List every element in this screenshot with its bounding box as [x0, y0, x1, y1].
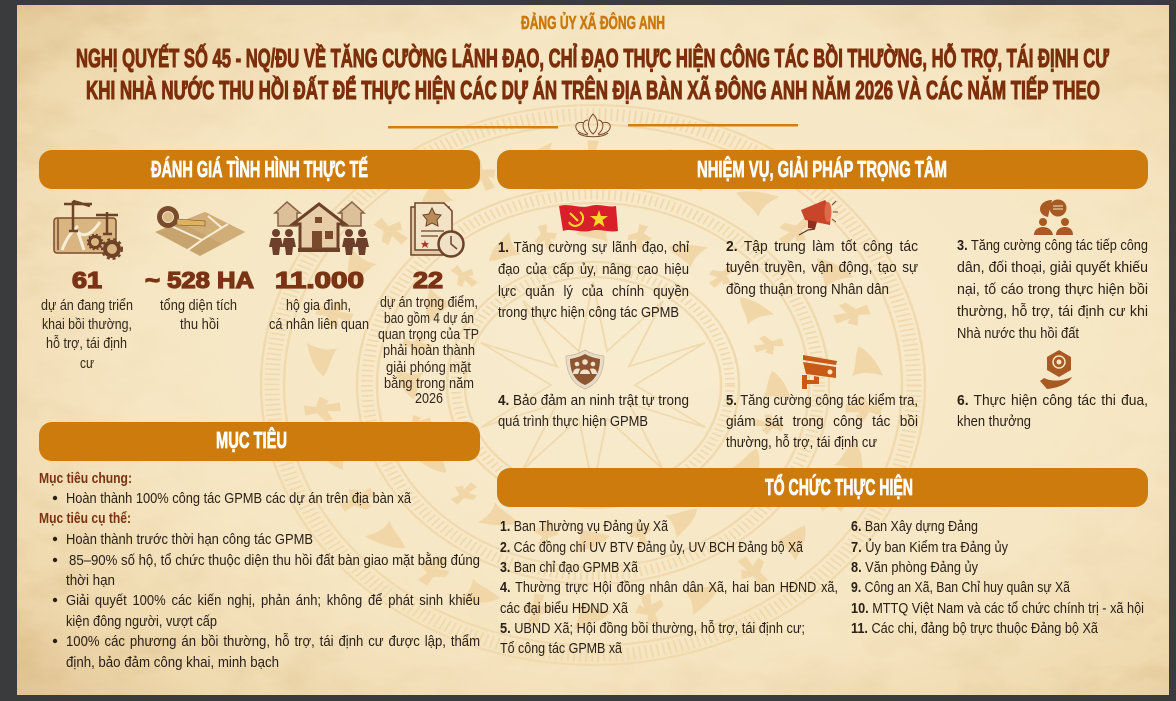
task 6 [957, 392, 1148, 430]
icon: megaphone [799, 200, 838, 235]
stat: 22 key projects: bao gồm 4 dự án [384, 310, 474, 327]
stat: 22 key projects: dự án trọng điểm, [380, 294, 478, 311]
implementers list, right column: 8. Văn phòng Đảng ủy [851, 559, 978, 576]
heading bar: tasks [497, 150, 1148, 189]
task 6: khen thưởng [957, 413, 1031, 430]
task 3: Nhà nước thu hồi đất [957, 325, 1080, 342]
task 4: 4. Bảo đảm an ninh trật tự trong [498, 392, 689, 409]
stat: 22 key projects: quan trọng của TP [378, 326, 479, 343]
stat: 61 projects: hỗ trợ, tái định [46, 335, 127, 352]
task 5: giám sát trong công tác bồi [726, 413, 918, 430]
stat: 11.000 households: 11.000 [275, 267, 364, 293]
general objective: Hoàn thành 100% công tác GPMB các dự án trên địa bàn xã [66, 490, 412, 507]
implementers list, left column: các đại biểu HĐND Xã [500, 600, 629, 617]
implementers list, right column [851, 518, 1144, 637]
task 4 [498, 392, 689, 430]
icon: award on open hand [1040, 350, 1072, 389]
task 1: đạo của cấp ủy, nâng cao hiệu [498, 261, 689, 278]
panel: objectives [39, 422, 480, 671]
panel: assessment [39, 150, 480, 407]
specific objectives [39, 510, 480, 671]
task 2: đồng thuận trong Nhân dân [726, 281, 889, 298]
implementers list, left column: Tổ công tác GPMB xã [500, 640, 623, 657]
main title [76, 43, 1109, 105]
stat: 528 hectares: ~ 528 HA [145, 267, 254, 293]
implementers list, left column [500, 518, 838, 657]
task 2 [726, 238, 918, 298]
specific objectives: 85–90% số hộ, tổ chức thuộc diện thu hồi đất bàn giao mặt bằng đúng [69, 552, 480, 569]
stat: 61 projects: 61 [72, 267, 102, 293]
heading bar: objectives: MỤC TIÊU [216, 426, 287, 453]
implementers list, left column: 4. Thường trực Hội đồng nhân dân Xã, hai ban HĐND xã, [500, 579, 838, 596]
task 1: 1. Tăng cường sự lãnh đạo, chỉ [498, 239, 690, 256]
heading bar: implementation [497, 468, 1148, 507]
task 3 [957, 237, 1148, 342]
header [76, 12, 1109, 105]
specific objectives: kiện đông người, vượt cấp [66, 613, 217, 630]
implementers list, left column: 5. UBND Xã; Hội đồng bồi thường, hỗ trợ, tái định cư; [500, 620, 805, 637]
specific objectives: thời hạn [66, 572, 115, 589]
task 2: 2. Tập trung làm tốt công tác [726, 238, 918, 255]
icon: party and national flags [559, 205, 618, 231]
task 3: thường, hỗ trợ, tái định cư khi [957, 303, 1148, 320]
stat: 61 projects: cư [80, 355, 94, 372]
heading bar: tasks: NHIỆM VỤ, GIẢI PHÁP TRỌNG TÂM [697, 154, 947, 182]
icon: surveillance camera [802, 355, 837, 389]
stat: 11.000 households: cá nhân liên quan [269, 316, 369, 333]
heading bar: assessment: ĐÁNH GIÁ TÌNH HÌNH THỰC TẾ [151, 155, 368, 182]
stat: 61 projects: dự án đang triển [41, 297, 133, 314]
task 3: nại, tố cáo trong thực hiện bồi [957, 281, 1148, 298]
panel: implementation [497, 468, 1148, 657]
icon: security shield [566, 350, 604, 389]
stat: 22 key projects [378, 267, 479, 407]
icon: lotus divider [388, 114, 798, 137]
stat: 528 hectares: tổng diện tích [160, 297, 237, 314]
task 4: quá trình thực hiện GPMB [498, 413, 648, 430]
specific objectives: Mục tiêu cụ thể: [39, 510, 131, 527]
stat: 528 hectares [145, 267, 254, 333]
stat: 22 key projects: 22 [413, 267, 443, 293]
general objective [39, 470, 412, 507]
task 1 [498, 239, 690, 321]
heading bar: objectives [39, 422, 480, 461]
stat: 61 projects [41, 267, 133, 372]
icon: blueprint with cranes and gears [54, 201, 122, 259]
task 5: 5. Tăng cường công tác kiểm tra, [726, 392, 918, 409]
task 1: trong thực hiện công tác GPMB [498, 304, 679, 321]
icon: citizens in dialogue [1034, 200, 1073, 235]
implementers list, left column: 1. Ban Thường vụ Đảng ủy Xã [500, 518, 669, 535]
heading bar: assessment [39, 150, 480, 189]
heading bar: implementation: TỔ CHỨC THỰC HIỆN [765, 473, 913, 500]
stat: 528 hectares: thu hồi [180, 316, 219, 333]
implementers list, left column: 2. Các đồng chí UV BTV Đảng ủy, UV BCH Đảng bộ Xã [500, 539, 804, 556]
organisation name: ĐẢNG ỦY XÃ ĐÔNG ANH [521, 12, 665, 33]
implementers list, right column: 11. Các chi, đảng bộ trực thuộc Đảng bộ Xã [851, 620, 1099, 637]
specific objectives: 100% các phương án bồi thường, hỗ trợ, tái định cư được lập, thẩm [66, 633, 480, 650]
implementers list, right column: 6. Ban Xây dựng Đảng [851, 518, 978, 535]
specific objectives: định, bảo đảm công khai, minh bạch [66, 654, 279, 671]
task 3: 3. Tăng cường công tác tiếp công [957, 237, 1148, 254]
stat: 61 projects: khai bồi thường, [42, 316, 132, 333]
task 6: 6. Thực hiện công tác thi đua, [957, 392, 1148, 409]
stat: 22 key projects: bằng trong năm [384, 375, 474, 392]
implementers list, right column: 7. Ủy ban Kiểm tra Đảng ủy [851, 538, 1008, 556]
stat: 11.000 households: hộ gia đình, [286, 297, 351, 314]
implementers list, right column: 9. Công an Xã, Ban Chỉ huy quân sự Xã [851, 579, 1071, 596]
stat: 11.000 households [269, 267, 369, 333]
task 1: lực quản lý của chính quyền [498, 283, 689, 300]
bronze drum watermark [261, 105, 925, 665]
task 5: thường, hỗ trợ, tái định cư [726, 434, 877, 451]
stat: 22 key projects: 2026 [415, 390, 443, 407]
stat: 22 key projects: phải hoàn thành [383, 342, 475, 359]
implementers list, left column: 3. Ban chỉ đạo GPMB Xã [500, 559, 639, 576]
panel: tasks and solutions [497, 150, 1148, 451]
specific objectives: Hoàn thành trước thời hạn công tác GPMB [66, 531, 313, 548]
task 2: tuyên truyền, vận động, tạo sự [726, 259, 918, 276]
task 5 [726, 392, 918, 451]
icon: document with clock [411, 203, 464, 256]
icon: land plot and measuring tape [155, 206, 245, 256]
icon: houses and people [269, 202, 369, 255]
task 3: dân, đối thoại, giải quyết khiếu [957, 259, 1148, 276]
stat: 22 key projects: giải phóng mặt [386, 359, 472, 376]
general objective: Mục tiêu chung: [39, 470, 132, 487]
specific objectives: Giải quyết 100% các kiến nghị, phản ánh; không để phát sinh khiếu [66, 592, 480, 609]
